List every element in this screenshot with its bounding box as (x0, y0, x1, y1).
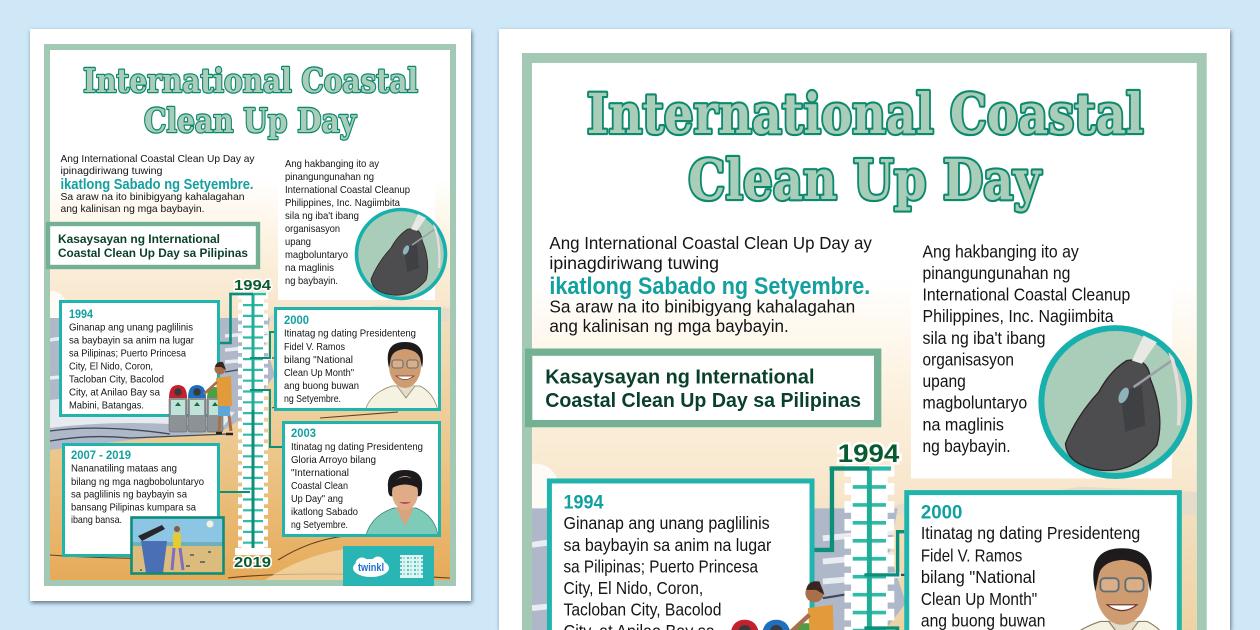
card: 2007-2019: sa paglilinis ng baybayin sa (71, 490, 187, 500)
poster frame (47, 47, 453, 583)
organisers text block: na maglinis (923, 414, 1004, 434)
icon: trash bag in circle (356, 210, 446, 298)
intro text block: ikatlong Sabado ng Setyembre. (60, 177, 254, 193)
intro text block: Ang International Coastal Clean Up Day ay (60, 154, 255, 165)
card: 1994: Tacloban City, Bacolod (69, 374, 164, 386)
card: 2000: 2000 (284, 315, 309, 327)
card: 2003: ikatlong Sabado (291, 507, 358, 518)
illustration: recycling bins and volunteer (730, 581, 836, 630)
organisers text block: Ang hakbanging ito ay (923, 241, 1079, 261)
white backing for right column (278, 180, 435, 300)
card: 1994: 1994 (564, 492, 604, 513)
panel: small poster (30, 29, 471, 601)
card: 2000: Itinatag ng dating Presidenteng (284, 328, 416, 340)
timeline start year: 1994 (234, 277, 272, 294)
history heading (48, 224, 258, 267)
card: 1994: sa baybayin sa anim na lugar (69, 336, 194, 346)
card: 2000: Fidel V. Ramos (284, 342, 345, 353)
intro text block (60, 154, 255, 215)
organisers text block: sila ng iba't ibang (285, 211, 359, 222)
organisers text block: magboluntaryo (923, 393, 1027, 413)
card: 2003: "International (291, 468, 349, 479)
card: 2007-2019: bilang ng mga nagboboluntaryo (71, 477, 204, 488)
organisers text block: ng baybayin. (285, 276, 338, 287)
title: International Coastal (83, 61, 418, 100)
organisers text block: pinangungunahan ng (923, 263, 1070, 283)
intro text block: ang kalinisan ng mga baybayin. (60, 204, 204, 215)
card: 2000 (276, 308, 440, 410)
organisers text block: Philippines, Inc. Nagiimbita (285, 198, 400, 209)
card: 2003: ng Setyembre. (291, 520, 348, 531)
organisers text block (285, 159, 410, 287)
card: 2003: Gloria Arroyo bilang (291, 455, 376, 466)
card: 2007-2019: bansang Pilipinas kumpara sa (71, 502, 196, 514)
history heading: Coastal Clean Up Day sa Pilipinas (58, 246, 248, 260)
title: International Coastal (587, 82, 1144, 146)
organisers text block (923, 241, 1130, 456)
portrait: Fidel V. Ramos (1080, 548, 1160, 630)
card: 2003: Up Day" ang (291, 494, 343, 505)
card: 2000: bilang "National (284, 355, 353, 366)
card: 1994: Ginanap ang unang paglilinis (564, 513, 770, 533)
history heading: Coastal Clean Up Day sa Pilipinas (545, 389, 861, 412)
timeline end year: 2019 (234, 554, 271, 571)
organisers text block: Philippines, Inc. Nagiimbita (923, 306, 1114, 326)
organisers text block: International Coastal Cleanup (923, 285, 1130, 305)
card: 2000 (907, 493, 1179, 630)
intro text block: ang kalinisan ng mga baybayin. (549, 316, 789, 336)
card: 2000: ang buong buwan (921, 610, 1046, 630)
card: 1994 (549, 481, 812, 630)
title: Clean Up Day (688, 148, 1042, 212)
intro text block: ikatlong Sabado ng Setyembre. (549, 273, 870, 300)
card: 2000: Itinatag ng dating Presidenteng (921, 523, 1140, 543)
card: 2007-2019: 2007 - 2019 (71, 450, 131, 462)
card: 2000: ng Setyembre. (284, 394, 341, 405)
intro text block: Ang International Coastal Clean Up Day ay (549, 233, 872, 253)
card: 2003: 2003 (291, 428, 316, 440)
organisers text block: upang (923, 371, 966, 391)
organisers text block: International Coastal Cleanup (285, 185, 410, 196)
icon: trash bag in circle (1041, 328, 1189, 476)
organisers text block: organisasyon (923, 349, 1014, 369)
timeline (220, 292, 282, 555)
title: Clean Up Day (144, 101, 357, 140)
organisers text block: ng baybayin. (923, 436, 1011, 456)
timeline start year: 1994 (838, 440, 899, 468)
organisers text block: organisasyon (285, 224, 340, 235)
photo: volunteer cleaning the beach (132, 518, 224, 574)
card: 1994: City, El Nido, Coron, (564, 578, 703, 598)
intro text block: Sa araw na ito binibigyang kahalagahan (549, 296, 855, 316)
organisers text block: upang (285, 237, 311, 248)
card: 1994: 1994 (69, 309, 94, 321)
brand badge: twinkl (358, 562, 384, 574)
card: 2003: Itinatag ng dating Presidenteng (291, 442, 423, 453)
card: 2007-2019 (64, 444, 218, 556)
title (83, 61, 418, 140)
card: 1994: City, at Anilao Bay sa (69, 388, 160, 398)
card: 1994: Ginanap ang unang paglilinis (69, 322, 193, 334)
history heading (529, 352, 878, 424)
history heading: Kasaysayan ng International (58, 232, 220, 246)
timeline (814, 465, 904, 630)
organisers text block: sila ng iba't ibang (923, 328, 1046, 348)
card: 1994: City, El Nido, Coron, (69, 362, 153, 372)
enlarged poster content (512, 58, 1202, 630)
card: 1994: Tacloban City, Bacolod (564, 600, 721, 620)
panel: enlarged poster (499, 29, 1230, 630)
card: 1994: sa Pilipinas; Puerto Princesa (69, 348, 186, 360)
white backing for right column (910, 306, 1172, 478)
beach scene background (38, 180, 450, 582)
card: 2007-2019: ibang bansa. (71, 515, 122, 526)
title (587, 82, 1144, 212)
card: 2000: Clean Up Month" (921, 589, 1037, 609)
card: 1994: Mabini, Batangas. (69, 400, 144, 412)
poster sheet (30, 29, 471, 601)
intro text block (549, 233, 872, 336)
intro text block: Sa araw na ito binibigyang kahalagahan (60, 192, 245, 203)
portrait: Fidel V. Ramos (365, 342, 438, 411)
history heading: Kasaysayan ng International (545, 366, 815, 389)
card: 2000: bilang "National (921, 567, 1036, 587)
organisers text block: Ang hakbanging ito ay (285, 159, 380, 170)
card: 2000: 2000 (921, 502, 962, 523)
card: 2007-2019: Nananatiling mataas ang (71, 464, 177, 474)
card: 2000: Fidel V. Ramos (921, 546, 1023, 566)
brand badge (343, 546, 434, 586)
organisers text block: na maglinis (285, 263, 334, 274)
card: 1994: sa baybayin sa anim na lugar (564, 535, 772, 555)
portrait: Gloria Arroyo (366, 470, 438, 535)
card: 1994 (60, 302, 218, 416)
card: 2000: ang buong buwan (284, 381, 359, 392)
poster frame (527, 58, 1202, 630)
organisers text block: magboluntaryo (285, 250, 348, 261)
card: 1994: sa Pilipinas; Puerto Princesa (564, 556, 758, 576)
illustration: recycling bins and volunteer (169, 362, 233, 434)
card: 2003: Coastal Clean (291, 481, 348, 492)
enlarged poster sheet (499, 29, 1230, 630)
organisers text block: pinangungunahan ng (285, 172, 374, 183)
card: 2000: Clean Up Month" (284, 368, 354, 379)
card: 2003 (284, 422, 440, 536)
intro text block: ipinagdiriwang tuwing (60, 166, 163, 177)
intro text block: ipinagdiriwang tuwing (549, 253, 719, 273)
beach scene background (532, 306, 1197, 630)
